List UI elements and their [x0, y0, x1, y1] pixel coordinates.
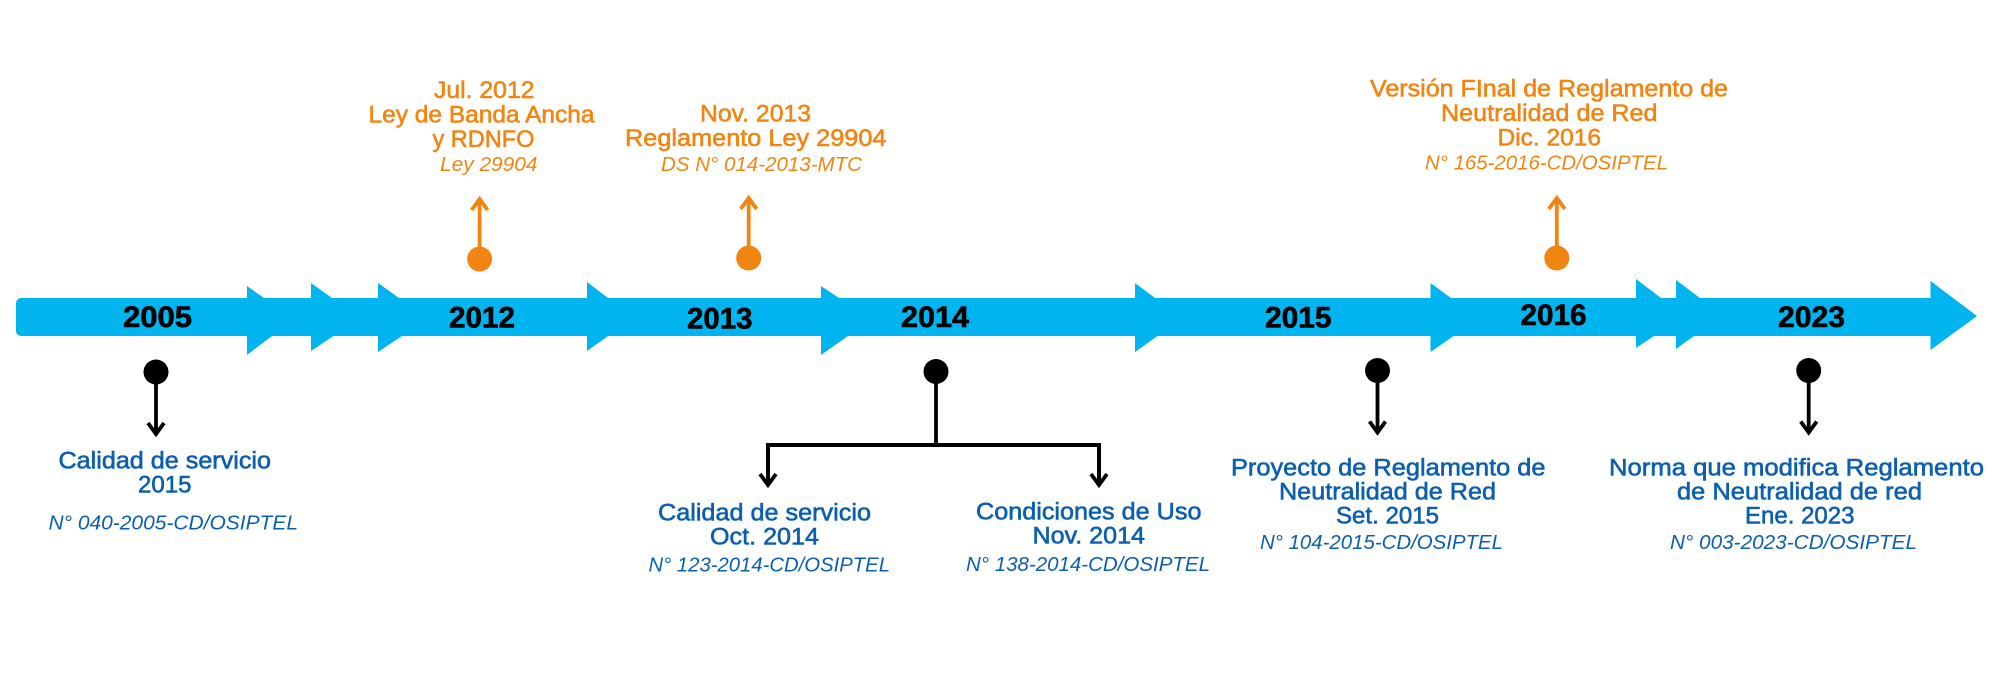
timeline arrow bar: [16, 279, 1977, 355]
year labels: 2016: [1520, 299, 1586, 332]
text: Proyecto de Reglamento: [1231, 454, 1546, 554]
text: Ley de Banda Ancha: [368, 77, 595, 176]
icon: black dot and down arrow: [1365, 358, 1390, 432]
text: Calidad de servicio: Calidad de servicio: [58, 448, 271, 474]
milestone: Set. 2015: [1231, 358, 1546, 554]
text: Versión Final de Reglamento: [1370, 76, 1728, 174]
icon: orange dot and up arrow: [736, 198, 761, 270]
year labels: 2013: [687, 302, 752, 336]
milestone: Calidad de servicio 2015: [48, 360, 298, 534]
icon: orange dot and up arrow: [1544, 198, 1569, 270]
text: Calidad de servicio Oct. 2014: Calidad de servicio: [658, 500, 871, 526]
text: Calidad de servicio: 2015: [138, 472, 192, 498]
text: Proyecto de Reglamento: N° 104-2015-CD/OSIPTEL: [1260, 531, 1503, 554]
text: Reglamento Ley 29904: DS N° 014-2013-MTC: [661, 153, 862, 176]
text: Norma que modifica Reglamento: de Neutralidad de red: [1677, 478, 1922, 506]
text: Ley de Banda Ancha: Jul. 2012: [434, 77, 534, 104]
year labels: [123, 299, 1845, 336]
text: Calidad de servicio: N° 040-2005-CD/OSIPTEL: [48, 512, 298, 534]
text: Versión Final de Reglamento: N° 165-2016-CD/OSIPTEL: [1425, 152, 1668, 174]
milestone: Dic. 2016: [1370, 76, 1728, 270]
text: Versión Final de Reglamento: Dic. 2016: [1498, 124, 1601, 152]
text: Ley de Banda Ancha: Ley 29904: [440, 153, 538, 176]
text: Reglamento Ley 29904: [625, 100, 886, 176]
text: Versión Final de Reglamento: Neutralidad de Red: [1441, 100, 1658, 127]
milestone: Jul. 2012: [368, 77, 595, 272]
year labels: 2005: [123, 301, 192, 334]
text: Reglamento Ley 29904: Reglamento Ley 29904: [625, 125, 886, 152]
text: Ley de Banda Ancha: y RDNFO: [432, 126, 534, 153]
text: Norma que modifica Reglamento: [1609, 454, 1984, 554]
text: Norma que modifica Reglamento: Norma que modifica Reglamento: [1609, 454, 1984, 482]
text: Proyecto de Reglamento: Set. 2015: [1336, 502, 1439, 530]
text: Calidad de servicio: [48, 448, 298, 534]
year labels: 2023: [1778, 301, 1845, 334]
text: Proyecto de Reglamento: Neutralidad de Red: [1279, 478, 1496, 506]
milestone: Nov. 2013: [625, 100, 886, 270]
year labels: 2012: [449, 302, 515, 334]
text: Reglamento Ley 29904: Nov. 2013: [700, 100, 811, 128]
text: Condiciones de Uso Nov. 2014: Condiciones de Uso: [976, 498, 1202, 526]
text: Calidad de servicio Oct. 2014: N° 123-2014-CD/OSIPTEL: [648, 554, 890, 576]
icon: black dot and down arrow: [144, 360, 168, 434]
text: Condiciones de Uso Nov. 2014: [966, 498, 1210, 576]
text: Versión Final de Reglamento: Versión FInal de Reglamento de: [1370, 76, 1728, 102]
milestone: Ene. 2023: [1609, 358, 1984, 554]
text: Ley de Banda Ancha: Ley de Banda Ancha: [368, 102, 595, 128]
text: Calidad de servicio Oct. 2014: [648, 500, 890, 576]
icon: black dot with branching arrows: [760, 359, 1107, 485]
icon: black dot and down arrow: [1796, 358, 1821, 432]
milestone: 2014 branch: [648, 359, 1210, 576]
text: Condiciones de Uso Nov. 2014: Nov. 2014: [1032, 522, 1145, 550]
text: Calidad de servicio Oct. 2014: Oct. 2014: [710, 524, 819, 550]
text: Proyecto de Reglamento: Proyecto de Reglamento de: [1231, 454, 1546, 482]
year labels: 2014: [901, 301, 970, 334]
text: Condiciones de Uso Nov. 2014: N° 138-2014-CD/OSIPTEL: [966, 553, 1210, 576]
icon: orange dot and up arrow: [467, 199, 492, 272]
text: Norma que modifica Reglamento: Ene. 2023: [1745, 502, 1854, 530]
text: Norma que modifica Reglamento: N° 003-2023-CD/OSIPTEL: [1670, 531, 1917, 554]
year labels: 2015: [1265, 302, 1332, 334]
